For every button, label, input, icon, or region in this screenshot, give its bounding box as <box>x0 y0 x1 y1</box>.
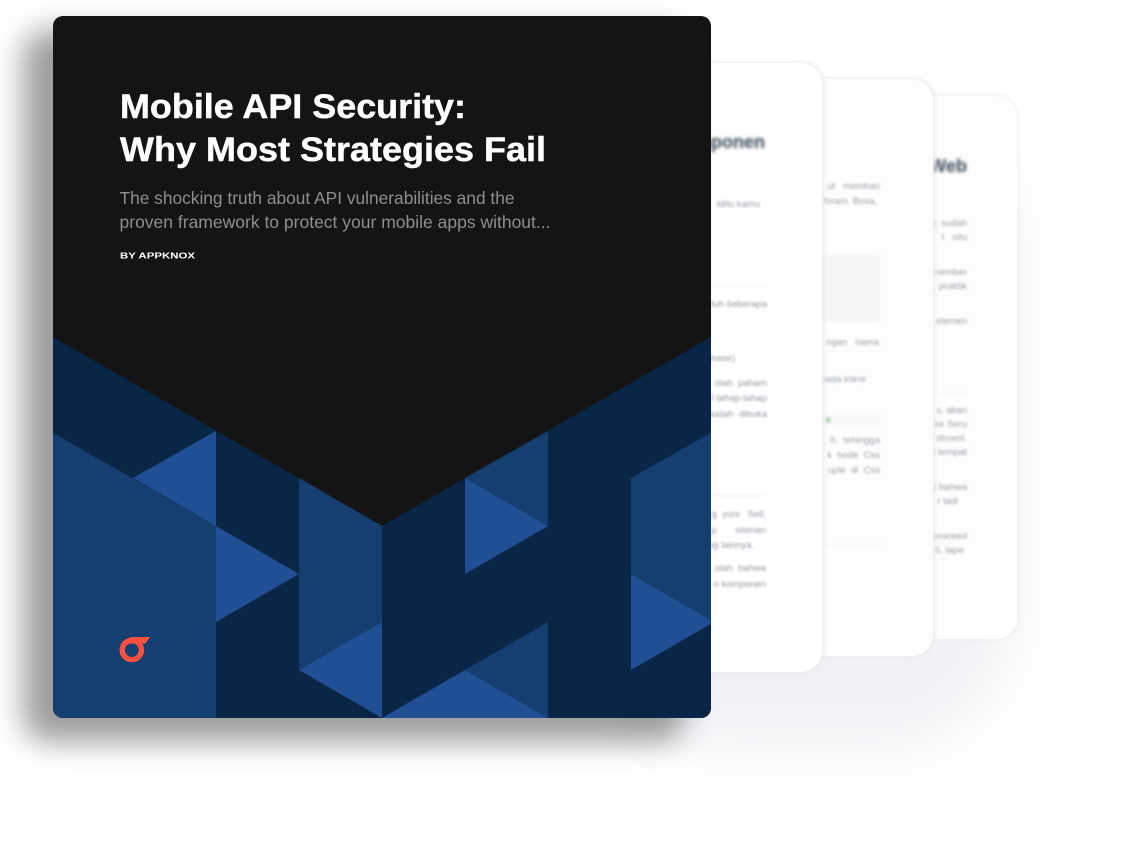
page 2 text: k hode Css <box>827 450 880 461</box>
page 1 text: sudah dibuka <box>708 409 768 420</box>
page 3 text: l tempat <box>933 447 967 458</box>
page 3 text: r, sudah <box>933 218 967 229</box>
page 1 text: g yuni Sell, <box>712 509 766 520</box>
icon: appknox logo <box>122 637 150 660</box>
page 3 text <box>932 218 968 556</box>
page 3 text: ke Seru <box>934 419 967 430</box>
page 2 text: h. tehingga <box>830 435 881 446</box>
title: Why Most Strategies Fail <box>120 131 546 169</box>
page 3 (back) <box>640 95 1018 640</box>
page 3 text: struvot. <box>936 433 967 444</box>
page 1 (front) <box>640 62 824 673</box>
page 3 text: member <box>932 267 967 278</box>
page 1 text: l tahap-tahap <box>712 393 767 404</box>
author byline: BY APPKNOX <box>120 252 196 260</box>
geometric pattern <box>53 337 714 718</box>
page 3 text: proceed <box>933 531 967 542</box>
page 1 text: olah bahwa <box>715 563 767 574</box>
page 3 text: S, tape <box>934 545 964 556</box>
page 2 text: uple di Css <box>828 465 880 476</box>
cover black background <box>53 16 711 718</box>
page 1 text: mase) <box>709 353 735 364</box>
page 3 text: t situ <box>942 232 967 243</box>
page 2 image placeholder <box>823 255 880 322</box>
cover drop shadow <box>23 30 685 742</box>
page 2 text: foram. Bosa, <box>823 196 877 207</box>
title: Mobile API Security: <box>120 88 466 126</box>
soft shadow behind pages <box>600 110 1015 750</box>
page 3 heading: Web <box>929 156 967 176</box>
page 3 text: , praktik <box>934 281 967 292</box>
page 3 text: elemen <box>936 316 967 327</box>
page 1 text: olah paham <box>715 378 767 389</box>
page 3 text: r ladi <box>937 496 958 507</box>
subtitle: The shocking truth about API vulnerabilities and the <box>120 188 514 208</box>
subtitle <box>120 188 550 232</box>
page 2 text: ut membari <box>827 181 880 192</box>
page 1 text: luh beberapa <box>712 299 768 310</box>
page 1 text: p sitenan <box>712 525 766 536</box>
page 2 (middle) <box>640 78 935 657</box>
subtitle: proven framework to protect your mobile apps without... <box>120 212 550 232</box>
page 1 text: ng lainnya. <box>708 540 754 551</box>
page 3 text: s, akan <box>936 405 967 416</box>
page 2 text: ngan nama <box>826 337 880 348</box>
cover card <box>53 16 714 718</box>
title <box>120 88 546 169</box>
page 1 text <box>708 199 768 590</box>
page 1 heading: Komponen <box>671 132 765 152</box>
page 1 text: n komponen <box>714 579 766 590</box>
page 2 status bar with green check <box>823 413 880 427</box>
page 2 text <box>820 181 881 545</box>
page 1 text: lditu kamu <box>717 199 760 210</box>
page 3 text: l bahwa <box>934 482 968 493</box>
page 2 text: pada inline <box>820 374 866 385</box>
